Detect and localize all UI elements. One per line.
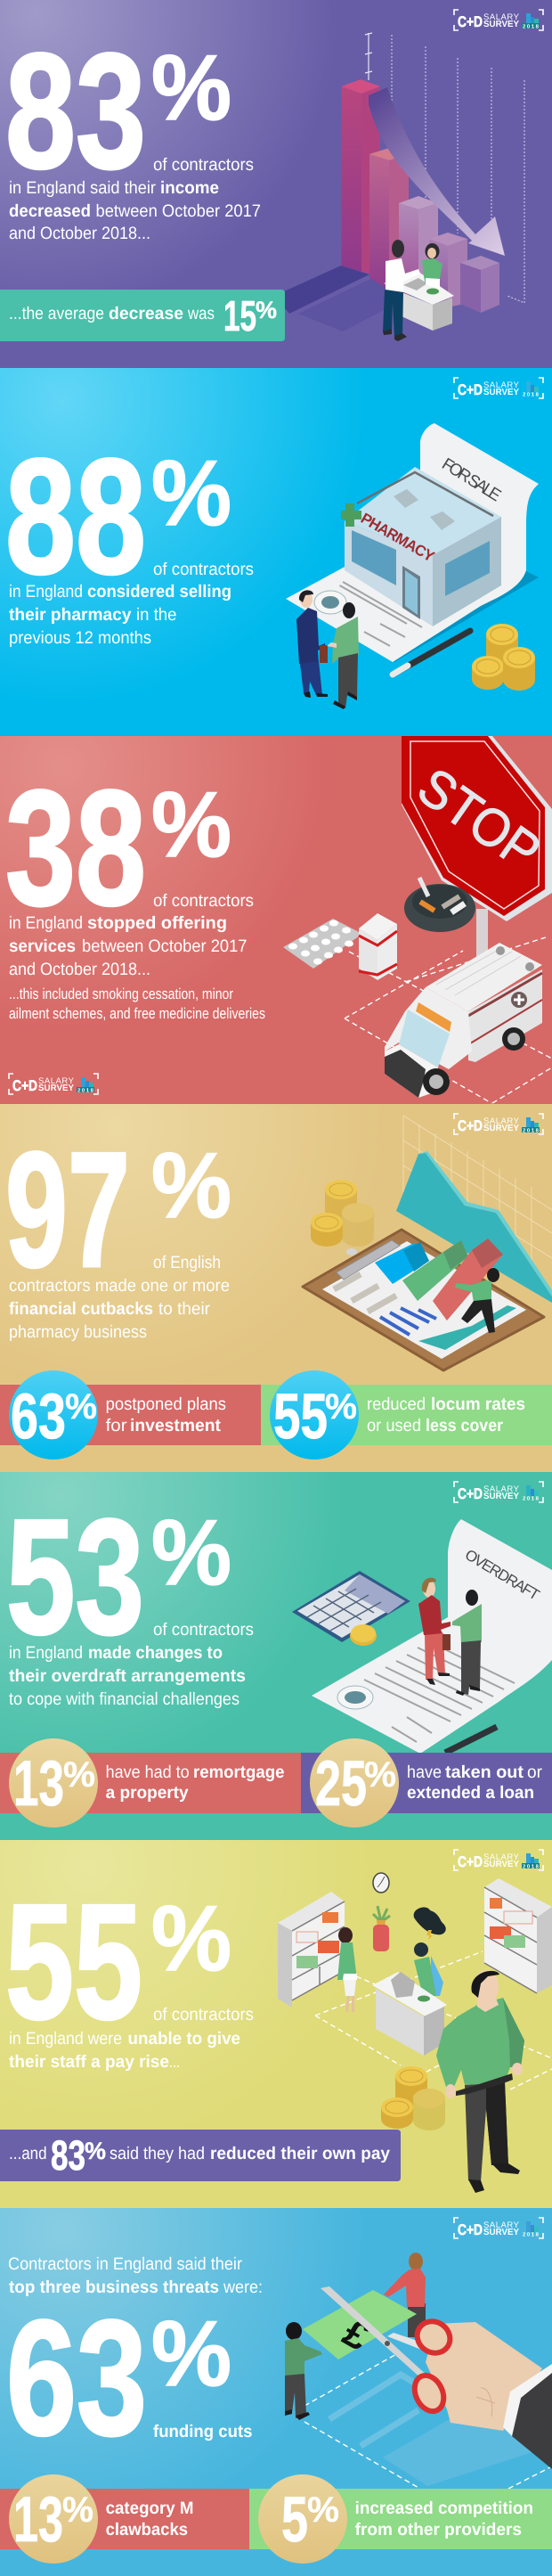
stat bar: category M clawbacks: category M [106, 2498, 194, 2518]
logo: C+D Salary Survey: 2018 [523, 1864, 540, 1869]
illustration: right shelves [484, 1878, 552, 1993]
text: cutbacks statement: contractors made one or more [9, 1276, 230, 1296]
text: overdraft statement: in England [9, 1643, 83, 1663]
text: services statement: ailment schemes, and free medicine deliveries [9, 1005, 265, 1022]
callout: reduced own pay [0, 2130, 401, 2181]
panel: financial cutbacks [0, 1104, 552, 1472]
stat bar: reduced locum rates: 55 [273, 1381, 328, 1452]
illustration: customer at counter [383, 240, 454, 341]
stat bar: remortgage: have had to [106, 1762, 190, 1782]
statistic: 88%: % [151, 442, 231, 545]
stat bar: loan: 25 [315, 1748, 367, 1820]
illustration: pharmacy for sale [286, 423, 539, 709]
icon: plant [373, 1906, 390, 1951]
stat bar: category M clawbacks: 13 [13, 2484, 63, 2556]
statistic: 53%: % [151, 1501, 231, 1605]
stat bar: loan: extended a loan [407, 1783, 534, 1803]
logo: C+D Salary Survey [9, 1074, 98, 1094]
text: income statement: decreased [9, 201, 91, 221]
text: threats intro: top three business threats [9, 2278, 219, 2297]
callout: average decrease 15%: was [187, 304, 215, 323]
illustration: ashtray [404, 878, 475, 932]
statistic: 83%: 83 [5, 19, 146, 202]
illustration: coin stacks [381, 2066, 445, 2130]
illustration: coin stacks [311, 1180, 374, 1247]
illustration: scissors in hand [321, 2286, 552, 2469]
stat bar: category M clawbacks: % [62, 2490, 93, 2530]
text: selling statement: in the [136, 605, 176, 625]
logo: C+D Salary Survey: SURVEY [38, 1084, 74, 1093]
stat bar: increased competition: 5 [281, 2484, 308, 2556]
panel: business threats [0, 2208, 552, 2576]
text: cutbacks statement: of English [153, 1253, 221, 1272]
text: pay rise statement: in England were [9, 2029, 122, 2049]
stat bar: reduced locum rates: locum rates [431, 1394, 525, 1414]
text: pay rise statement: unable to give [128, 2029, 240, 2049]
panel: stopped offering services [0, 736, 552, 1104]
callout: reduced own pay: % [85, 2138, 106, 2164]
logo: C+D Salary Survey: C+D [458, 2221, 483, 2238]
logo: C+D Salary Survey: SALARY [483, 1484, 520, 1494]
text: cutbacks statement: to their [158, 1299, 210, 1319]
callout: average decrease 15% [0, 290, 285, 341]
logo: C+D Salary Survey: C+D [458, 1853, 483, 1870]
text: cutbacks statement [9, 1253, 230, 1342]
logo: C+D Salary Survey: C+D [458, 1117, 483, 1134]
illustration: blister pack and box [283, 913, 397, 980]
stat bar: loan: % [364, 1755, 396, 1795]
text: income statement: income [160, 178, 219, 198]
statistic: 55%: 55 [5, 1869, 142, 2053]
label: overdraft: OVERDRAFT [462, 1546, 542, 1604]
illustration: green person [285, 2322, 322, 2420]
text: selling statement: previous 12 months [9, 628, 151, 648]
stat bar: postponed plans [0, 1370, 261, 1460]
text: pay rise statement: of contractors [153, 2005, 254, 2024]
illustration: banknote: £ [336, 2310, 377, 2359]
stat bar: postponed plans: for [106, 1416, 127, 1435]
people: handshake on document [418, 1578, 482, 1696]
text: selling statement: considered selling [87, 582, 231, 601]
stat bar: reduced locum rates [261, 1370, 552, 1460]
chart: falling bars with arrow [274, 33, 524, 331]
label: for sale: FOR SALE [438, 454, 504, 505]
logo: C+D Salary Survey: 2018 [77, 1087, 94, 1094]
text: income statement: in England said their [9, 178, 156, 198]
logo: C+D Salary Survey [454, 1850, 543, 1870]
logo: C+D Salary Survey: 2018 [523, 2231, 540, 2238]
stat bar: postponed plans: investment [130, 1416, 221, 1435]
stat bar: increased competition [249, 2474, 552, 2564]
illustration: grid [403, 1116, 552, 1265]
illustration: stop sign [402, 736, 552, 962]
panel: pay rise [0, 1840, 552, 2208]
callout: average decrease 15%: decrease [109, 304, 183, 323]
logo: C+D Salary Survey: SURVEY [483, 1124, 519, 1133]
illustration: clipboard and figure [303, 1230, 544, 1370]
stat bar: remortgage: % [63, 1755, 95, 1795]
statistic: 55%: % [151, 1887, 231, 1991]
text: services statement: between October 2017 [82, 936, 248, 956]
stat bar: reduced locum rates: less cover [426, 1416, 503, 1435]
logo: C+D Salary Survey: C+D [458, 381, 483, 398]
callout: average decrease 15%: ...the average [9, 304, 104, 323]
illustration: dashed floor [345, 937, 552, 1103]
logo: C+D Salary Survey [454, 378, 543, 398]
text: pay rise statement: ... [169, 2052, 180, 2072]
text: pay rise statement [9, 2005, 254, 2072]
text: services statement: in England [9, 913, 83, 933]
stat bar: increased competition: % [307, 2490, 339, 2530]
chart: teal area [396, 1151, 552, 1303]
stat bar: remortgage [0, 1738, 301, 1828]
stat bar: postponed plans: postponed plans [106, 1394, 226, 1414]
logo: C+D Salary Survey: SALARY [38, 1076, 75, 1086]
statistic: 97%: % [151, 1134, 231, 1238]
illustration: banknote [303, 2290, 417, 2359]
stat bar: loan: taken out [445, 1762, 524, 1782]
logo: C+D Salary Survey: 2018 [523, 1128, 540, 1133]
stat bar: category M clawbacks [0, 2474, 249, 2564]
logo: C+D Salary Survey: 2018 [523, 1495, 540, 1502]
icon: coin stacks [472, 624, 535, 691]
stat bar: reduced locum rates: reduced [367, 1394, 426, 1414]
logo: C+D Salary Survey: C+D [458, 1485, 483, 1502]
illustration: counter with staff [337, 1927, 447, 2056]
statistic: 83%: % [151, 37, 231, 140]
logo: C+D Salary Survey [454, 1114, 543, 1134]
stat bar: increased competition: from other providers [355, 2520, 522, 2539]
stat bar: loan: have [407, 1762, 442, 1782]
stat bar: remortgage: remortgage [193, 1762, 285, 1782]
text: overdraft statement [9, 1620, 254, 1709]
icon: storm cloud [414, 1908, 446, 1940]
text: funding cuts: funding cuts [153, 2422, 253, 2441]
illustration: overdraft document [312, 1519, 552, 1754]
logo: C+D Salary Survey: SURVEY [483, 1492, 519, 1501]
illustration: left shelves [278, 1892, 345, 2008]
illustration: man with empty pocket [436, 1970, 524, 2193]
logo: C+D Salary Survey: C+D [458, 13, 483, 30]
logo: C+D Salary Survey: SALARY [483, 1116, 520, 1126]
illustration: calculator [292, 1571, 410, 1646]
callout: reduced own pay: 83 [51, 2131, 85, 2179]
text: income statement: and October 2018... [9, 224, 150, 243]
callout: average decrease 15%: 15 [223, 293, 256, 340]
statistic: 97%: 97 [5, 1117, 130, 1301]
illustration: ambulance [385, 943, 542, 1098]
text: threats intro: Contractors in England said their [8, 2254, 242, 2274]
logo: C+D Salary Survey: SALARY [483, 2220, 520, 2230]
text: services statement [9, 891, 265, 1022]
logo: C+D Salary Survey: SALARY [483, 380, 520, 390]
stat bar: loan [301, 1738, 552, 1828]
logo: C+D Salary Survey: SURVEY [483, 1860, 519, 1869]
text: income statement: between October 2017 [96, 201, 261, 221]
text: overdraft statement: their overdraft arrangements [9, 1666, 246, 1686]
statistic: 38%: 38 [5, 756, 146, 939]
text: pay rise statement: their staff a pay rise [9, 2052, 169, 2072]
stat bar: category M clawbacks: clawbacks [106, 2520, 188, 2539]
text: services statement: stopped offering [87, 913, 227, 933]
text: threats intro: were: [223, 2278, 263, 2297]
callout: reduced own pay: reduced their own pay [210, 2144, 390, 2163]
illustration: dashed floor [315, 1951, 552, 2089]
logo: C+D Salary Survey: 2018 [523, 392, 540, 397]
logo: C+D Salary Survey: C+D [12, 1077, 37, 1094]
text: services statement: ...this included smoking cessation, minor [9, 985, 233, 1002]
logo: C+D Salary Survey: SALARY [483, 1852, 520, 1862]
text: selling statement: in England [9, 582, 83, 601]
text: threats intro [8, 2254, 263, 2297]
stat bar: reduced locum rates: or used [367, 1416, 421, 1435]
logo: C+D Salary Survey: SURVEY [483, 20, 519, 29]
statistic: 63%: 63 [6, 2286, 147, 2469]
text: overdraft statement: made changes to [88, 1643, 223, 1663]
logo: C+D Salary Survey: SURVEY [483, 388, 519, 397]
text: overdraft statement: to cope with financial challenges [9, 1689, 239, 1709]
logo: C+D Salary Survey [454, 10, 543, 30]
text: services statement: of contractors [153, 891, 254, 911]
stat bar: postponed plans: 63 [11, 1381, 66, 1452]
statistic: 38%: % [151, 773, 231, 877]
text: income statement [9, 155, 261, 243]
logo: C+D Salary Survey: SURVEY [483, 2228, 519, 2237]
statistic: 63%: % [151, 2302, 231, 2406]
stat bar: increased competition: increased competition [355, 2498, 533, 2518]
text: cutbacks statement: pharmacy business [9, 1322, 147, 1342]
text: selling statement [9, 560, 254, 648]
stat bar: reduced locum rates: % [325, 1387, 357, 1427]
icon: clock [373, 1873, 389, 1893]
logo: C+D Salary Survey: SALARY [483, 12, 520, 22]
text: overdraft statement: of contractors [153, 1620, 254, 1640]
callout: reduced own pay: ...and [9, 2144, 47, 2163]
callout: reduced own pay: said they had [110, 2144, 205, 2163]
statistic: 88%: 88 [5, 424, 146, 608]
logo: C+D Salary Survey [454, 2218, 543, 2238]
text: cutbacks statement: financial cutbacks [9, 1299, 153, 1319]
logo: C+D Salary Survey: 2018 [523, 23, 540, 30]
panel: overdraft [0, 1472, 552, 1840]
text: services statement: and October 2018... [9, 960, 150, 979]
sign: pharmacy: PHARMACY [358, 510, 438, 566]
stat bar: postponed plans: % [65, 1387, 97, 1427]
panel: income decreased [0, 0, 552, 368]
statistic: 53%: 53 [6, 1484, 144, 1668]
stat bar: loan: or [527, 1762, 542, 1782]
callout: average decrease 15%: % [256, 297, 277, 323]
stat bar: remortgage: 13 [13, 1748, 64, 1820]
logo: C+D Salary Survey [454, 1482, 543, 1502]
people: handshake [296, 590, 359, 709]
illustration: red person [384, 2253, 426, 2337]
text: selling statement: of contractors [153, 560, 254, 579]
panel: considered selling [0, 368, 552, 736]
stat bar: remortgage: a property [106, 1783, 189, 1803]
illustration: floor tile and dashes [304, 2353, 552, 2489]
text: services statement: services [9, 936, 76, 956]
text: income statement: of contractors [153, 155, 254, 175]
text: selling statement: their pharmacy [9, 605, 132, 625]
